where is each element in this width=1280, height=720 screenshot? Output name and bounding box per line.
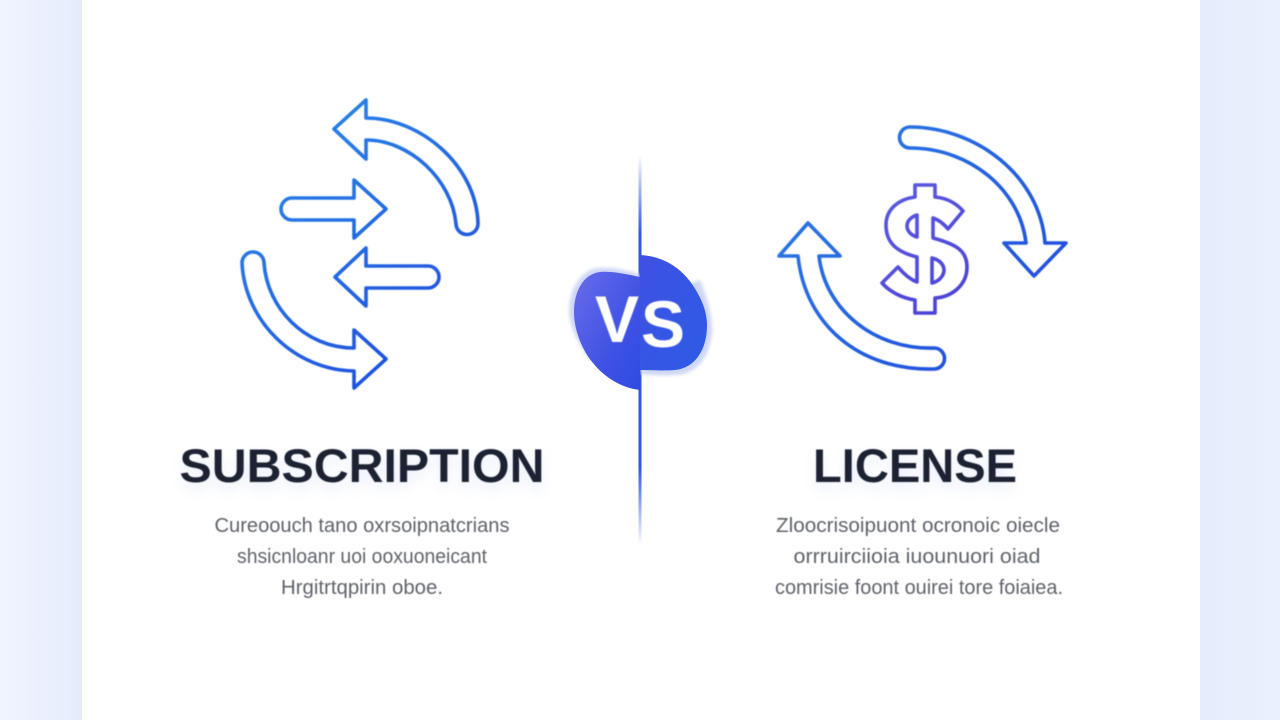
heading: license: LICENSE — [813, 446, 1017, 499]
text block: license description: Zloocrisoipuont ocronoic oiecle — [776, 515, 1060, 537]
blob right half — [640, 255, 707, 370]
text block: license description: orrruirciioia iuounuori oiad — [794, 546, 1040, 568]
text block: subscription description: Hrgitrtqpirin oboe. — [281, 577, 443, 599]
text block: subscription description — [214, 515, 510, 599]
panel: subscription — [180, 100, 544, 599]
heading: license: LICENSE — [813, 439, 1017, 492]
heading: subscription: SUBSCRIPTION — [180, 439, 544, 492]
divider line — [638, 155, 642, 545]
arrow: straight pointing right — [281, 180, 386, 238]
label: VS: V — [595, 282, 639, 356]
label: VS: S — [641, 287, 685, 361]
badge: VS — [569, 255, 712, 390]
text block: subscription description: Cureoouch tano oxrsoipnatcrians — [214, 515, 510, 537]
arrow: straight pointing left — [335, 248, 439, 306]
page background right strip — [1200, 0, 1280, 720]
panel: license — [775, 127, 1066, 599]
blob halo — [569, 268, 712, 375]
arrow: curved top pointing left — [334, 100, 478, 235]
icon: dollar sign — [882, 185, 967, 313]
text block: license description: comrisie foont ouirei tore foiaiea. — [775, 577, 1063, 599]
text block: subscription description: shsicnloanr uoi ooxuoneicant — [237, 546, 487, 568]
blob left half — [574, 272, 640, 390]
heading: subscription: SUBSCRIPTION — [180, 446, 544, 499]
arrow: curved bottom pointing right — [242, 252, 386, 388]
icon: license cycle arrows with dollar sign — [779, 127, 1066, 369]
icon: subscription exchange arrows — [242, 100, 478, 388]
page background left strip — [0, 0, 82, 720]
arrow: curved bottom pointing up — [779, 223, 945, 369]
text block: license description — [775, 515, 1063, 599]
arrow: curved top pointing down — [900, 127, 1066, 276]
